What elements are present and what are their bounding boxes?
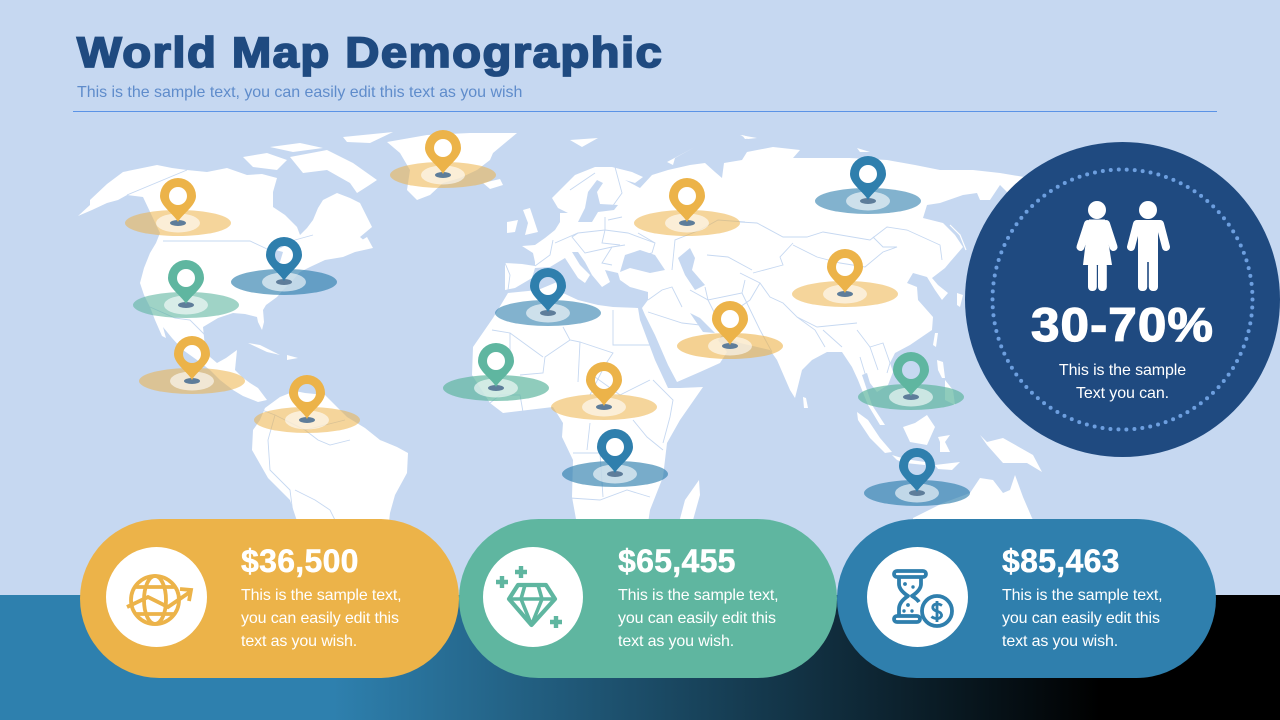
marker: Greenland (390, 130, 496, 188)
card 3 value: $85,463 (1002, 543, 1120, 579)
marker: Arabia (677, 301, 783, 359)
panel: income card 1 (80, 519, 459, 678)
card 1 text (241, 587, 402, 650)
card 2 text: you can easily edit this (618, 610, 776, 627)
card 1 text: text as you wish. (241, 633, 357, 650)
card 3 text: text as you wish. (1002, 633, 1118, 650)
card 2 text (618, 587, 778, 650)
circle caption: This is the sample (1059, 362, 1186, 379)
demographic circle panel (965, 142, 1280, 457)
marker: central Africa (551, 362, 657, 420)
card 1 value: $36,500 (241, 543, 359, 579)
marker: Southeast Asia (858, 352, 964, 410)
marker: eastern USA (231, 237, 337, 295)
marker: southern Africa (562, 429, 668, 487)
card 3 text: This is the sample text, (1002, 587, 1162, 604)
card 2 text: text as you wish. (618, 633, 734, 650)
marker: Mediterranean (495, 268, 601, 326)
card 3 text: you can easily edit this (1002, 610, 1160, 627)
bottom gradient band (0, 595, 1280, 720)
marker: Mexico (139, 336, 245, 394)
title: World Map Demographic (77, 29, 663, 77)
icon: globe with arrow (126, 574, 194, 626)
card 3 text (1002, 587, 1162, 650)
panel: income card 2 (459, 519, 837, 678)
marker: Siberia (815, 156, 921, 214)
card 1 text: This is the sample text, (241, 587, 402, 604)
marker: western Russia (634, 178, 740, 236)
percentage figure: 30-70% (1031, 298, 1214, 351)
circle caption: Text you can. (1076, 384, 1169, 402)
icon: man (1131, 201, 1166, 291)
marker: Alaska Canada (125, 178, 231, 236)
marker: West Africa (443, 343, 549, 401)
marker: Venezuela (254, 375, 360, 433)
marker: Australia (864, 448, 970, 506)
subtitle: This is the sample text, you can easily edit this text as you wish (77, 84, 522, 101)
icon: hourglass with coin (892, 569, 954, 628)
card 2 value: $65,455 (618, 543, 736, 579)
circle caption (1059, 362, 1186, 402)
panel: income card 3 (837, 519, 1216, 678)
card 1 text: you can easily edit this (241, 610, 399, 627)
icon: diamond with sparkles (496, 566, 562, 628)
icon: woman (1080, 201, 1114, 291)
marker: China (792, 249, 898, 307)
marker: western USA (133, 260, 239, 318)
card 2 text: This is the sample text, (618, 587, 778, 604)
